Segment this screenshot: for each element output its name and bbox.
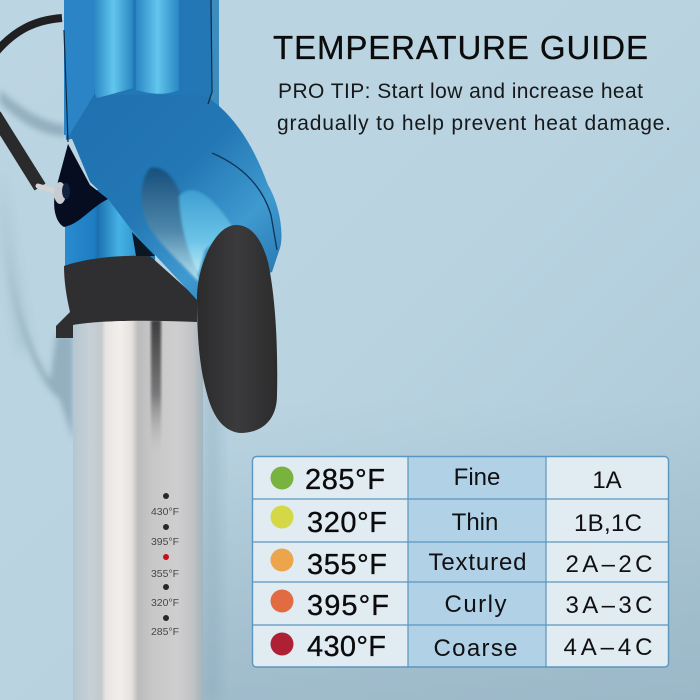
barrel temperature markings: 395°F	[151, 536, 179, 548]
table background	[252, 456, 668, 667]
tube light panel one	[94, 0, 133, 98]
temperature table	[252, 456, 668, 667]
row 355F: 2A–2C	[566, 551, 652, 578]
head seam	[212, 153, 277, 250]
barrel dark reflection	[151, 320, 161, 455]
row 430F: 4A–4C	[564, 634, 652, 661]
neck shadow	[132, 232, 155, 256]
pro tip text	[277, 80, 671, 135]
barrel temperature markings: 285°F	[151, 626, 179, 638]
curling iron	[0, 0, 282, 700]
black mount	[54, 144, 108, 227]
tube and panel seams	[64, 0, 212, 142]
row 395F: Curly	[444, 591, 506, 618]
table border	[252, 456, 668, 667]
cord	[0, 18, 62, 52]
title: TEMPERATURE GUIDE	[273, 29, 648, 66]
barrel	[73, 320, 203, 700]
barrel temperature markings: 430°F	[151, 506, 179, 518]
table grid	[252, 456, 668, 667]
upper blue handle tube	[64, 0, 219, 140]
middle column fill	[408, 457, 546, 667]
cord lower section	[0, 115, 40, 187]
tube light panel two	[136, 0, 179, 94]
barrel temperature markings: 320°F	[151, 597, 179, 609]
row 355F: 355°F	[307, 549, 387, 581]
barrel temperature markings: 355°F	[151, 568, 179, 580]
row 395F	[270, 590, 652, 622]
row 285F: 1A	[592, 467, 622, 494]
barrel temperature markings	[151, 493, 179, 638]
lower blue neck	[65, 190, 155, 266]
swivel pin	[38, 182, 70, 204]
row 320F: 1B,1C	[574, 510, 642, 537]
head hollow	[141, 168, 199, 282]
row 355F	[270, 548, 652, 581]
collar	[56, 256, 197, 338]
row 355F: Textured	[428, 549, 526, 576]
finger pad	[179, 190, 232, 275]
tube left body	[64, 0, 94, 135]
pro tip text: gradually to help prevent heat damage.	[277, 112, 671, 135]
row 430F	[270, 631, 652, 663]
row 430F: 430°F	[307, 631, 386, 663]
row 285F: Fine	[454, 464, 500, 491]
blue head	[70, 95, 282, 300]
row 320F: Thin	[452, 509, 498, 536]
row 285F: 285°F	[305, 464, 385, 496]
tube right lighter strip	[211, 0, 219, 108]
lever	[197, 225, 277, 433]
row 395F: 395°F	[307, 590, 389, 622]
row 320F: 320°F	[307, 507, 387, 539]
row 285F	[270, 464, 622, 496]
row 430F: Coarse	[434, 635, 518, 662]
row 320F	[270, 506, 642, 539]
row 395F: 3A–3C	[566, 592, 652, 619]
pro tip text: PRO TIP: Start low and increase heat	[278, 80, 643, 103]
wall shadows	[0, 90, 220, 700]
